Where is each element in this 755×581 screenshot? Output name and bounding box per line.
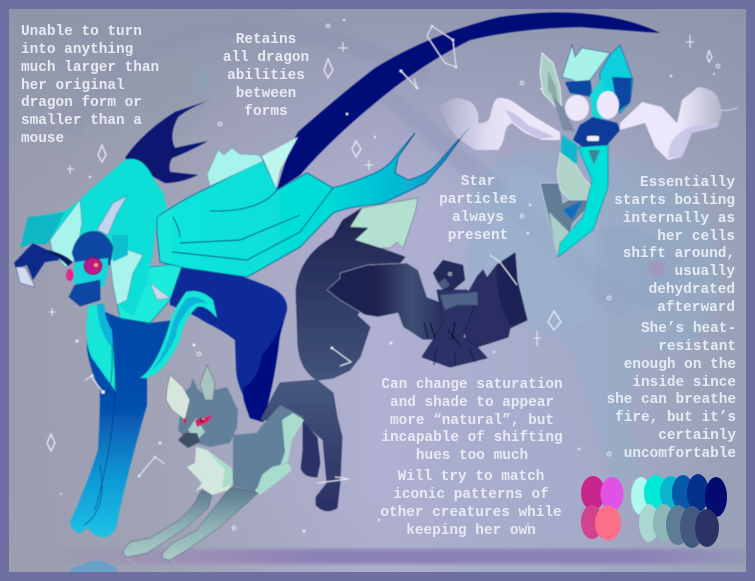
dragon wing claw <box>14 212 67 287</box>
text: boiling while shifting: afterward <box>657 300 735 316</box>
dragon tail <box>277 12 660 190</box>
text: heat resistance: fire, but it’s <box>615 410 736 426</box>
raven <box>327 253 527 367</box>
text: saturation and shade: more “natural”, but <box>390 413 554 429</box>
text: matching patterns: keeping her own <box>406 523 536 539</box>
text: matching patterns: iconic patterns of <box>393 487 549 503</box>
text: saturation and shade: and shade to appear <box>390 395 554 411</box>
text: size limits: into anything <box>21 42 133 58</box>
text: saturation and shade: incapable of shifting <box>381 430 563 446</box>
colour palette: pinks <box>581 476 624 540</box>
dragon pale wing fin <box>207 148 263 186</box>
text: retained abilities <box>223 32 309 120</box>
text: size limits: much larger than <box>21 60 159 76</box>
text: star particles <box>439 174 517 244</box>
wolf form: crouching body <box>124 405 304 560</box>
text: heat resistance: uncomfortable <box>624 446 736 462</box>
dragon dark wing membrane <box>125 99 213 183</box>
text: retained abilities: abilities <box>227 68 305 84</box>
text: heat resistance: she can breathe <box>606 392 736 408</box>
text: heat resistance <box>606 321 736 462</box>
text: size limits: her original <box>21 78 125 94</box>
wolf form: tail and back <box>296 208 405 380</box>
text: star particles: Star <box>461 174 495 190</box>
text: saturation and shade: Can change saturation <box>381 377 563 393</box>
text: star particles: always <box>452 210 504 226</box>
text: heat resistance: inside since <box>632 375 736 391</box>
dragon chest and front legs <box>70 291 217 537</box>
wolf pale tail tip <box>350 198 418 248</box>
text: saturation and shade: hues too much <box>416 448 528 464</box>
text: size limits: Unable to turn <box>21 24 142 40</box>
dragon cyan underside at the chest <box>117 263 183 323</box>
text: boiling while shifting: internally as <box>623 211 735 227</box>
text: matching patterns: Will try to match <box>398 469 544 485</box>
text: boiling while shifting: starts boiling <box>614 193 735 209</box>
text: size limits <box>21 24 159 147</box>
dragon folded wing over shoulder <box>28 159 167 317</box>
text: boiling while shifting: dehydrated <box>649 282 735 298</box>
text: boiling while shifting: Essentially <box>640 175 735 191</box>
text: heat resistance: certainly <box>658 428 736 444</box>
text: heat resistance: resistant <box>658 339 736 355</box>
constellations <box>85 25 517 483</box>
dragon hind leg <box>170 262 287 422</box>
dragon head <box>46 196 170 306</box>
wolf head <box>166 365 238 448</box>
text: star particles: present <box>448 228 508 244</box>
text: retained abilities: forms <box>244 104 288 120</box>
floor shadow band <box>30 549 746 564</box>
dragon wing fold lines <box>172 188 333 260</box>
colour palette: blues and greys <box>631 474 727 548</box>
wolf form: hind legs <box>260 380 342 511</box>
text: saturation and shade <box>381 377 563 464</box>
text: boiling while shifting: shift around, <box>623 246 735 262</box>
ghost dragon bust <box>540 45 633 257</box>
text: matching patterns <box>380 469 562 539</box>
foot reflections <box>70 555 205 572</box>
text: boiling while shifting <box>614 175 735 316</box>
text: heat resistance: enough on the <box>624 357 736 373</box>
text: size limits: dragon form or <box>21 95 142 111</box>
text: boiling while shifting: her cells <box>657 229 735 245</box>
text: heat resistance: She’s heat- <box>641 321 736 337</box>
text: size limits: mouse <box>21 131 64 147</box>
star sparkles <box>47 19 720 533</box>
text: star particles: particles <box>439 192 517 208</box>
text: matching patterns: other creatures while <box>380 505 562 521</box>
text: retained abilities: between <box>236 86 296 102</box>
text: boiling while shifting: usually <box>675 264 735 280</box>
dragon main cyan wing <box>157 127 470 277</box>
text: size limits: smaller than a <box>21 113 142 129</box>
text: retained abilities: Retains <box>236 32 296 48</box>
ghost smoke from the eyes <box>440 87 738 160</box>
text: retained abilities: all dragon <box>223 50 309 66</box>
